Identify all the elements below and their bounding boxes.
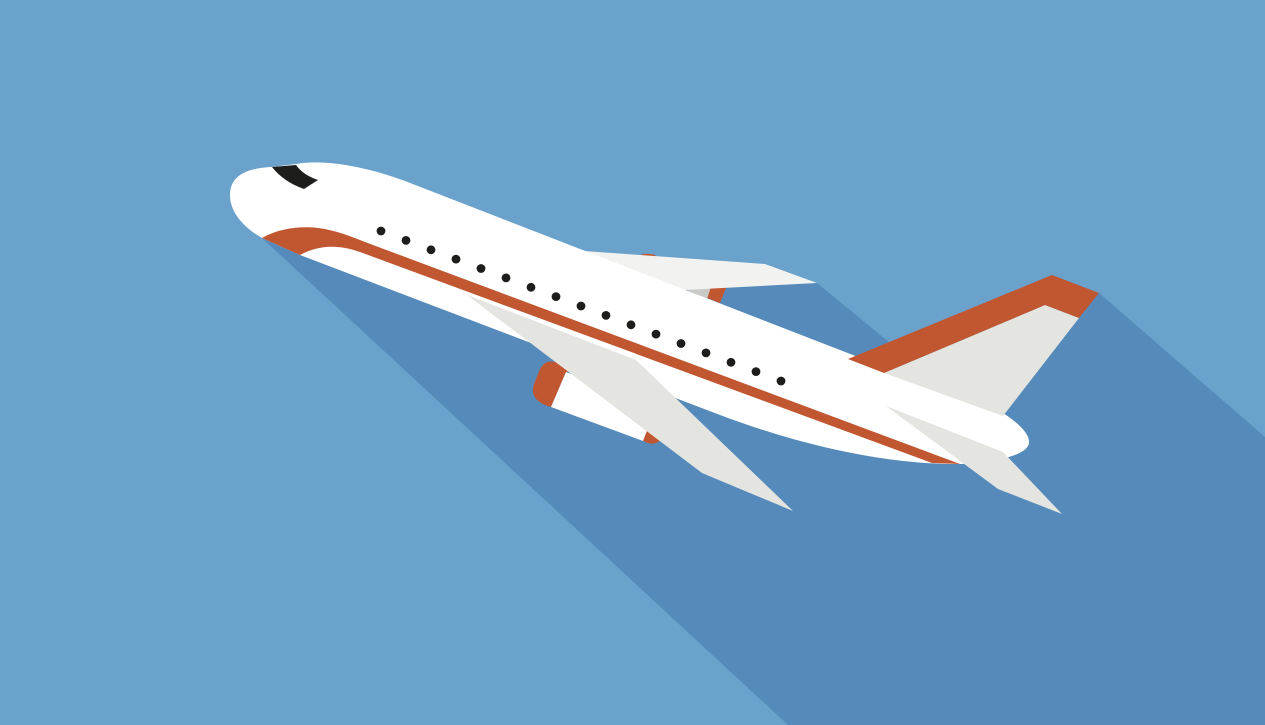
vertical tail <box>848 275 1099 416</box>
cockpit windshield <box>272 165 318 189</box>
near tailplane <box>886 406 1062 514</box>
tail fin <box>884 305 1079 416</box>
near wing <box>467 295 793 511</box>
far engine grey inlet <box>684 287 711 299</box>
tail leading edge <box>848 275 1099 373</box>
fuselage <box>230 162 1029 464</box>
engine exhaust <box>643 430 672 444</box>
cabin windows <box>377 227 785 385</box>
engine intake <box>533 361 580 407</box>
far engine <box>638 254 726 303</box>
cheatline stripe <box>262 227 960 464</box>
near engine <box>533 361 672 444</box>
long shadow <box>262 238 1265 725</box>
far wing <box>584 251 817 290</box>
engine body <box>551 372 648 441</box>
